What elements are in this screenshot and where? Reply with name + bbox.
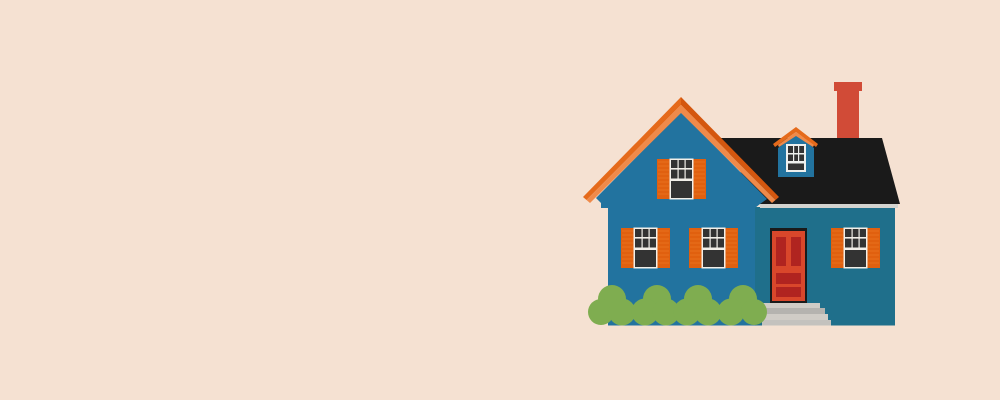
left window with shutters (621, 228, 670, 268)
gable roof trim (583, 97, 779, 203)
dormer roof trim (773, 127, 818, 147)
middle window with shutters (689, 228, 738, 268)
dormer window (786, 144, 806, 172)
chimney (834, 82, 862, 139)
front steps (762, 303, 831, 326)
front door (770, 228, 807, 303)
black roof (720, 138, 900, 204)
dormer wall (778, 134, 814, 177)
green bushes (588, 285, 767, 326)
dormer (773, 127, 818, 177)
upper window with shutters (657, 158, 706, 200)
main gable wall (596, 112, 767, 326)
right window with shutters (831, 228, 880, 268)
right wing wall (755, 207, 895, 326)
eave strip (760, 204, 898, 208)
